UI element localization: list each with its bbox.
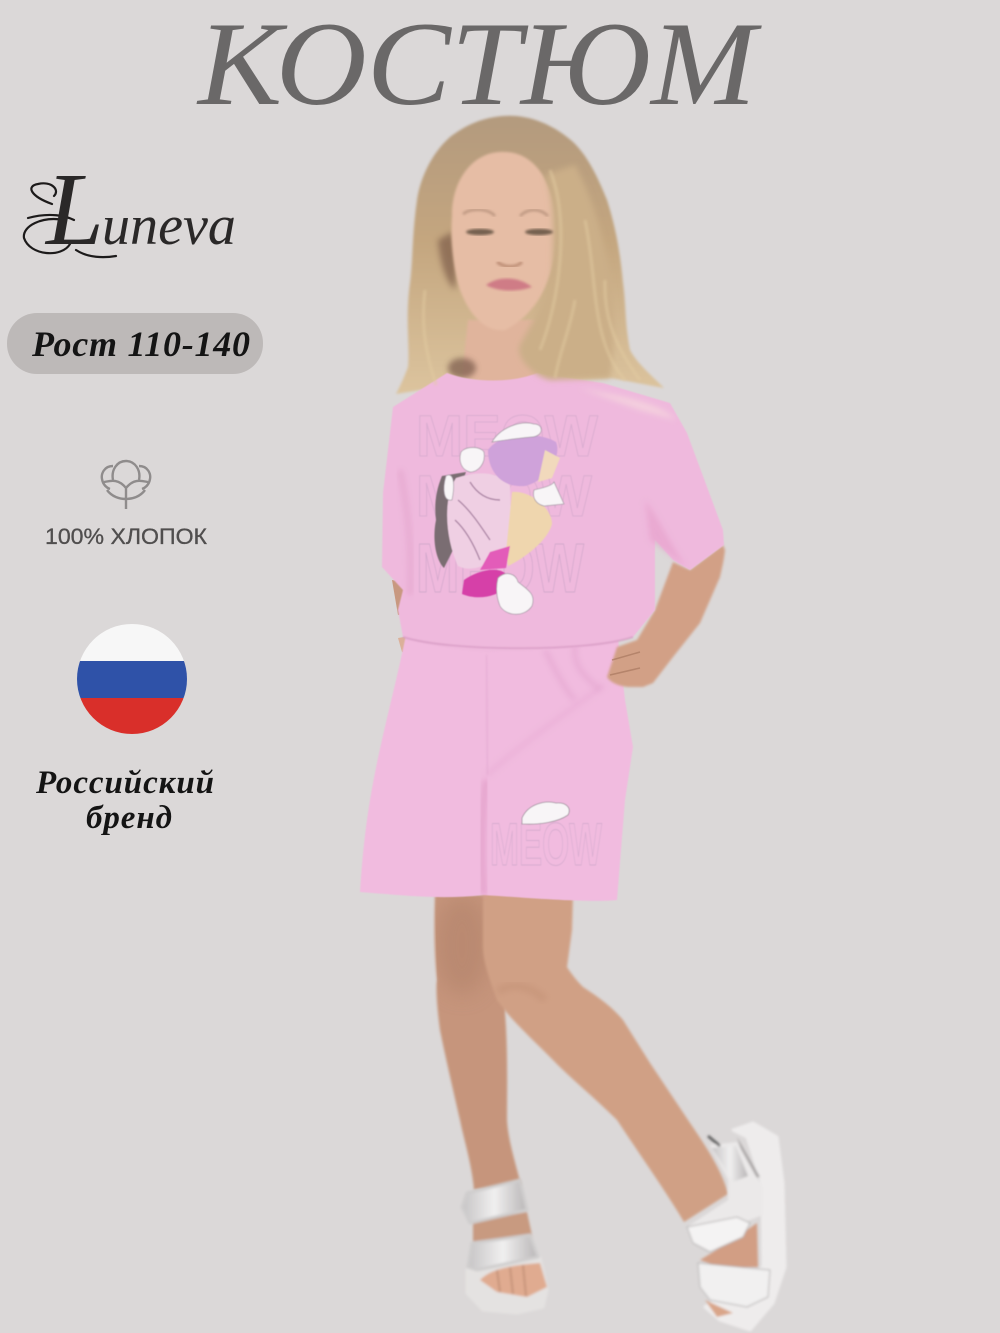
nose <box>497 262 522 266</box>
eyes <box>466 229 494 235</box>
left leg <box>434 895 521 1190</box>
left sandal <box>462 1180 547 1313</box>
shorts cat <box>522 802 569 824</box>
brand logo: uneva <box>102 195 236 257</box>
photo: girl in pink suit <box>360 116 785 1330</box>
t-shirt text print <box>416 404 598 607</box>
hair <box>396 116 664 394</box>
print: shoes <box>462 570 508 597</box>
t-shirt text print: MEOW <box>416 529 584 607</box>
brand origin label <box>35 765 214 836</box>
brand logo <box>24 152 236 267</box>
t-shirt anime print <box>434 423 564 614</box>
height badge: Рост 110-140 <box>31 324 250 364</box>
print: jacket <box>447 473 512 569</box>
t-shirt <box>382 373 724 652</box>
cotton icon <box>102 461 150 509</box>
brand logo: L <box>44 152 104 267</box>
print: backpack <box>434 472 466 568</box>
print: hair <box>488 435 557 486</box>
neck <box>462 320 538 386</box>
face <box>451 152 614 380</box>
brand origin label: Российский <box>35 765 214 801</box>
title: КОСТЮМ <box>196 0 762 130</box>
cotton label: 100% ХЛОПОК <box>45 524 207 549</box>
right sandal <box>687 1123 785 1330</box>
print: cats <box>444 423 564 614</box>
t-shirt text print: MEOW <box>416 404 598 469</box>
right leg <box>483 892 728 1222</box>
mouth <box>486 278 532 291</box>
russian flag <box>77 624 187 735</box>
print: legs <box>506 492 552 566</box>
hair strands <box>423 170 640 385</box>
shorts <box>360 630 633 901</box>
viewer left arm <box>392 580 420 615</box>
viewer right arm and hand <box>607 545 725 687</box>
shorts print: MEOW <box>490 811 602 878</box>
height badge <box>7 313 263 374</box>
t-shirt text print: MEOW <box>416 464 592 529</box>
brand origin label: бренд <box>86 800 172 836</box>
